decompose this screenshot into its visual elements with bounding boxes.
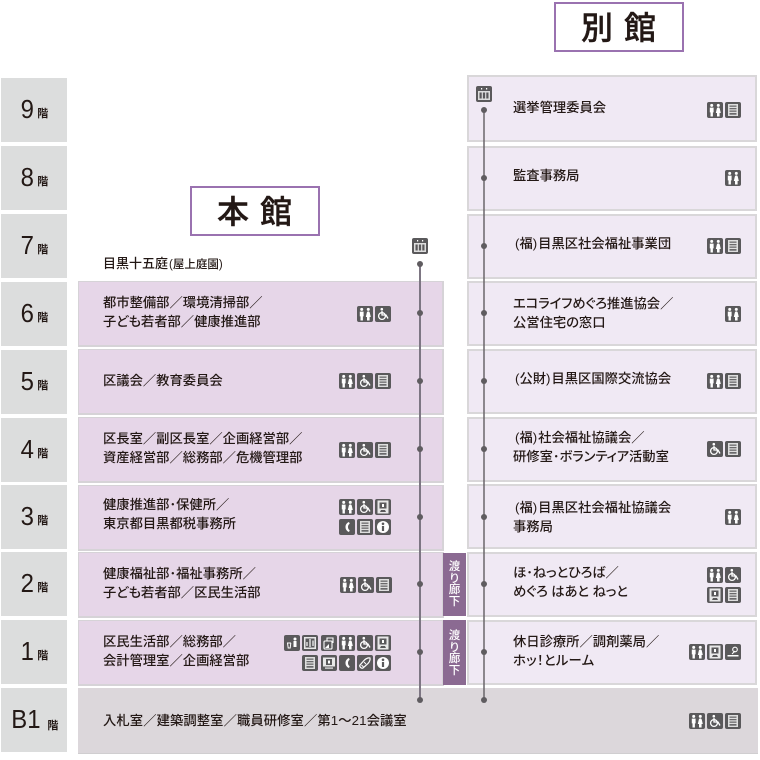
floor label: 1F: 1 bbox=[20, 636, 34, 666]
floor label: 1F bbox=[1, 620, 67, 684]
panel: main building 1F bbox=[78, 620, 444, 686]
text: annex 3F: 事務局 bbox=[513, 518, 553, 534]
panel: main building 6F bbox=[78, 281, 444, 347]
floor label: 9F bbox=[1, 78, 67, 142]
connector: 2F walkway: 廊 bbox=[449, 584, 460, 596]
panel: annex 7F bbox=[467, 214, 757, 279]
panel: main building 4F bbox=[78, 417, 444, 483]
icons: main 2F bbox=[340, 577, 392, 593]
floor label: 8F bbox=[1, 146, 67, 210]
floor label: B1F: 階 bbox=[47, 720, 58, 732]
text: annex 3F bbox=[513, 500, 671, 534]
floor label: 7F: 7 bbox=[20, 230, 34, 260]
floor label: 6F bbox=[1, 282, 67, 346]
icons: B1 bbox=[689, 713, 741, 729]
icons: annex 2F bbox=[707, 567, 741, 603]
text: annex 6F: 公営住宅の窓口 bbox=[513, 314, 606, 330]
text: main 4F: 資産経営部／総務部／危機管理部 bbox=[103, 450, 302, 464]
connector: 1F walkway: 廊 bbox=[449, 653, 460, 665]
text: main 1F: 区民生活部／総務部／ bbox=[103, 634, 236, 649]
connector: 2F walkway: り bbox=[449, 572, 460, 584]
icons: annex 3F bbox=[725, 509, 741, 525]
text: main 6F: 子ども若者部／健康推進部 bbox=[103, 314, 261, 328]
title: main building: 本 館 bbox=[217, 194, 293, 230]
floor label: 3F: 階 bbox=[37, 515, 48, 527]
connector: 2F walkway bbox=[443, 553, 466, 616]
icons: main 1F bbox=[284, 635, 391, 671]
title: annex building bbox=[554, 2, 684, 52]
text: main 2F: 健康福祉部･福祉事務所／ bbox=[103, 566, 256, 581]
text: main 3F: 健康推進部･保健所／ bbox=[103, 497, 229, 512]
text: annex 1F: 休日診療所／調剤薬局／ bbox=[513, 634, 659, 649]
text: annex 8F: 監査事務局 bbox=[513, 168, 579, 183]
floor label: B1F bbox=[1, 688, 67, 752]
panel: main building 2F bbox=[78, 552, 444, 618]
connector: 1F walkway: 渡 bbox=[449, 630, 460, 642]
text: main 4F: 区長室／副区長室／企画経営部／ bbox=[103, 431, 302, 446]
elevator line: annex bbox=[481, 107, 487, 703]
floor label: 4F: 4 bbox=[20, 434, 34, 464]
connector: 1F walkway: り bbox=[449, 642, 460, 654]
floor label: 6F: 6 bbox=[20, 298, 34, 328]
icons: main 4F bbox=[339, 442, 391, 458]
floor label: 8F: 8 bbox=[20, 162, 34, 192]
text: annex 2F: ほ･ねっとひろば／ bbox=[513, 565, 619, 580]
floor label: 2F: 階 bbox=[37, 582, 48, 594]
floor label: B1F: B1 bbox=[11, 704, 40, 734]
floor label: 3F: 3 bbox=[20, 501, 34, 531]
floor label: 4F: 階 bbox=[37, 448, 48, 460]
panel: annex 5F bbox=[467, 349, 757, 414]
text: main 6F: 都市整備部／環境清掃部／ bbox=[103, 295, 263, 310]
title: main building bbox=[190, 186, 320, 236]
panel: annex 9F bbox=[467, 75, 757, 142]
floor label: 8F: 階 bbox=[37, 176, 48, 188]
floor label: 5F bbox=[1, 350, 67, 414]
panel: annex 2F bbox=[467, 552, 757, 617]
floor label: 7F: 階 bbox=[37, 244, 48, 256]
text: B1: 入札室／建築調整室／職員研修室／第1～21会議室 bbox=[103, 713, 407, 728]
floor label: 2F: 2 bbox=[20, 568, 34, 598]
text: main 1F bbox=[103, 634, 249, 668]
panel: annex 8F bbox=[467, 146, 757, 211]
text: main 2F: 子ども若者部／区民生活部 bbox=[103, 584, 261, 600]
icons: annex 1F bbox=[689, 644, 741, 660]
text: annex 9F: 選挙管理委員会 bbox=[513, 100, 606, 115]
panel: main building 3F bbox=[78, 485, 444, 551]
text: annex 4F: 研修室･ボランティア活動室 bbox=[513, 448, 669, 464]
text: rooftop garden: 目黒十五庭(屋上庭園) bbox=[103, 256, 223, 271]
text: annex 4F bbox=[513, 430, 669, 464]
icons: annex 7F bbox=[707, 238, 741, 254]
text: main 3F bbox=[103, 497, 236, 530]
floor label: 9F: 階 bbox=[37, 108, 48, 120]
floor label: 7F bbox=[1, 214, 67, 278]
icons: annex 4F bbox=[707, 441, 741, 457]
panel: annex 1F bbox=[467, 620, 757, 685]
panel: annex 4F bbox=[467, 417, 757, 482]
floor label: 5F: 階 bbox=[37, 380, 48, 392]
icons: annex 9F bbox=[707, 102, 741, 118]
panel: annex 6F bbox=[467, 281, 757, 346]
icons: annex 5F bbox=[707, 373, 741, 389]
text: annex 7F: (福)目黒区社会福祉事業団 bbox=[515, 236, 671, 251]
connector: 2F walkway: 下 bbox=[449, 596, 460, 608]
text: main 1F: 会計管理室／企画経営部 bbox=[103, 652, 249, 668]
floor label: 2F bbox=[1, 552, 67, 616]
text: main 2F bbox=[103, 566, 261, 600]
title: annex building: 別 館 bbox=[581, 10, 657, 46]
text: main 3F: 東京都目黒都税事務所 bbox=[103, 516, 236, 530]
text: annex 5F: (公財)目黒区国際交流協会 bbox=[515, 371, 671, 386]
text: annex 4F: (福)社会福祉協議会／ bbox=[515, 430, 645, 445]
text: annex 2F bbox=[513, 565, 628, 598]
text: annex 3F: (福)目黒区社会福祉協議会 bbox=[515, 500, 671, 515]
floor label: 5F: 5 bbox=[20, 366, 34, 396]
text: main 5F: 区議会／教育委員会 bbox=[103, 373, 223, 388]
elevator line: main building bbox=[417, 261, 423, 703]
panel: main building 5F bbox=[78, 349, 444, 415]
connector: 2F walkway: 渡 bbox=[449, 561, 460, 573]
text: annex 2F: めぐろ はあと ねっと bbox=[513, 584, 628, 598]
panel: basement B1 bbox=[78, 688, 758, 754]
text: annex 6F bbox=[513, 296, 673, 330]
text: main 6F bbox=[103, 295, 263, 328]
icon: main elevator bbox=[412, 238, 428, 254]
text: annex 6F: エコライフめぐろ推進協会／ bbox=[513, 296, 673, 311]
text: main 4F bbox=[103, 431, 302, 464]
icons: main 3F bbox=[339, 499, 391, 535]
floor label: 6F: 階 bbox=[37, 312, 48, 324]
floor label: 9F: 9 bbox=[20, 94, 34, 124]
text: annex 1F bbox=[513, 634, 659, 668]
connector: 1F walkway bbox=[443, 620, 466, 685]
floor label: 1F: 階 bbox=[37, 650, 48, 662]
icons: main 5F bbox=[339, 373, 391, 389]
connector: 1F walkway: 下 bbox=[449, 664, 460, 676]
icons: annex 6F bbox=[725, 306, 741, 322]
panel: annex 3F bbox=[467, 484, 757, 549]
floor label: 4F bbox=[1, 418, 67, 482]
icon: annex elevator bbox=[476, 86, 492, 102]
floor label: 3F bbox=[1, 485, 67, 549]
text: annex 1F: ホッ！とルーム bbox=[513, 652, 594, 668]
icons: main 6F bbox=[357, 306, 391, 322]
icons: annex 8F bbox=[725, 170, 741, 186]
